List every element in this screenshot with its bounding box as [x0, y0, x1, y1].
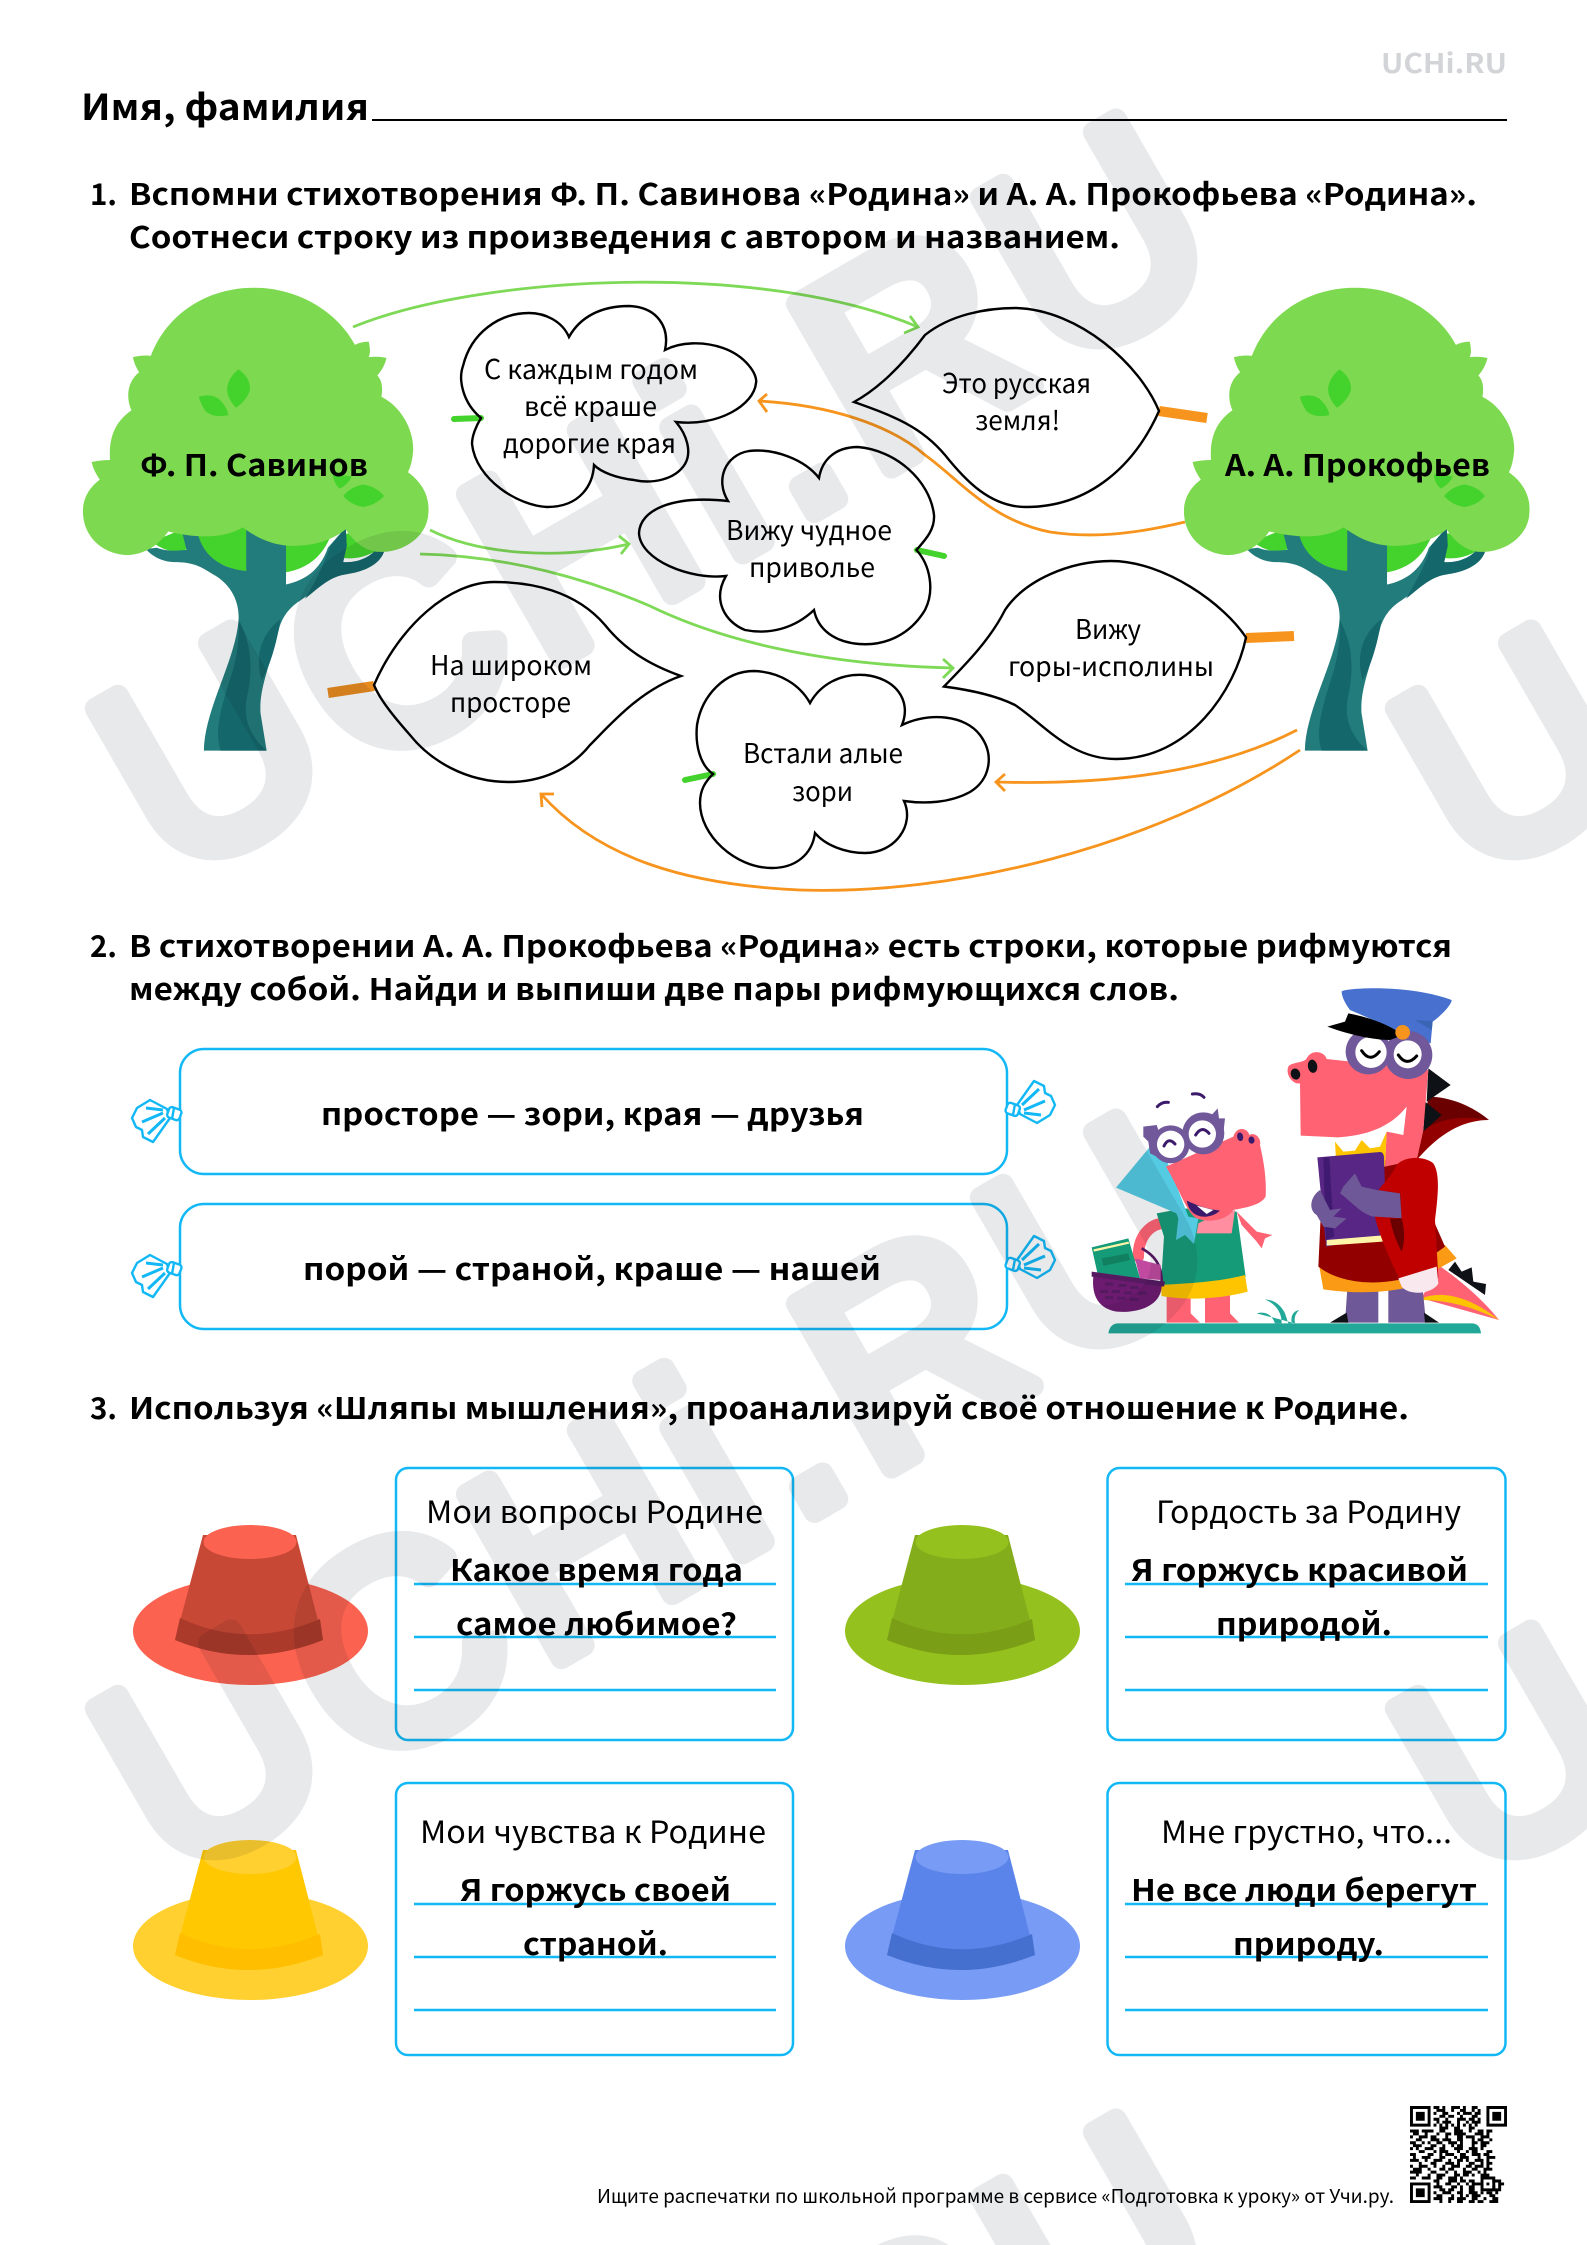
panel: sad: Не все люди берегут — [1131, 1866, 1477, 1910]
cloud: с каждым годом: всё краше — [524, 385, 657, 424]
name field: Имя, фамилия — [81, 79, 369, 131]
panel: pride: Я горжусь красивой — [1131, 1546, 1468, 1590]
question 1 heading — [90, 170, 1477, 257]
question 2 heading: между собой. Найди и выпиши две пары рифмующихся слов. — [129, 965, 1179, 1009]
tree: Prokofiev — [1184, 288, 1530, 751]
question 3 heading: Используя «Шляпы мышления», проанализируй своё отношение к Родине. — [129, 1384, 1409, 1428]
watermark: UCHi.RU — [48, 50, 1271, 934]
arrows orange — [541, 394, 1300, 890]
hat: green — [845, 1525, 1080, 1685]
cloud: с каждым годом: С каждым годом — [484, 348, 698, 387]
cloud: вижу чудное: приволье — [749, 546, 875, 585]
cloud: с каждым годом: дорогие края — [503, 422, 676, 461]
answer box 1 — [132, 1049, 1055, 1174]
panel: pride: природой. — [1216, 1600, 1392, 1644]
leaf: вижу горы-исполины: Вижу — [1075, 608, 1141, 647]
panel: my questions — [396, 1468, 793, 1740]
cloud: вижу чудное — [639, 447, 944, 644]
panel: my feelings: Мои чувства к Родине — [420, 1807, 766, 1852]
panel: pride: Гордость за Родину — [1156, 1487, 1461, 1532]
logo: UCHi.RU — [1381, 42, 1507, 81]
question 1 heading: Вспомни стихотворения Ф. П. Савинова «Родина» и А. А. Прокофьева «Родина». — [129, 170, 1477, 214]
panel: my questions: Мои вопросы Родине — [426, 1487, 763, 1532]
answer box 2 — [132, 1204, 1055, 1329]
tall dino — [1288, 988, 1499, 1323]
cloud: вижу чудное: Вижу чудное — [726, 509, 892, 548]
hat: red — [133, 1525, 368, 1685]
watermark: UCHi.RU — [48, 1050, 1271, 1934]
question 2 heading: 2. — [90, 922, 117, 966]
panel: sad — [1108, 1783, 1506, 2055]
small dino — [1092, 1094, 1272, 1323]
leaf: это русская земля: земля! — [975, 399, 1060, 438]
footer text: Ищите распечатки по школьной программе в сервисе «Подготовка к уроку» от Учи.ру. — [597, 2182, 1394, 2209]
leaf: на широком просторе: просторе — [450, 681, 571, 720]
panel: pride — [1108, 1468, 1506, 1740]
panel: my questions: Какое время года — [450, 1546, 743, 1590]
hat: blue — [845, 1840, 1080, 2000]
question 2 heading: В стихотворении А. А. Прокофьева «Родина» есть строки, которые рифмуются — [129, 922, 1452, 966]
answer box 2: порой — страной, краше — нашей — [303, 1245, 881, 1289]
question 3 heading: 3. — [90, 1384, 117, 1428]
leaf: вижу горы-исполины: горы-исполины — [1008, 645, 1214, 684]
leaf: это русская земля — [854, 308, 1207, 507]
ground and grass — [1108, 1299, 1481, 1333]
arrows green — [353, 282, 953, 678]
illustration: two dinosaurs — [1092, 988, 1499, 1333]
panel: my feelings: Я горжусь своей — [460, 1866, 731, 1910]
leaf: вижу горы-исполины — [944, 561, 1294, 759]
hat: yellow — [133, 1840, 368, 2000]
leaf: на широком просторе — [328, 582, 681, 782]
tree label: Prokofiev: А. А. Прокофьев — [1224, 441, 1490, 485]
panel: my questions: самое любимое? — [456, 1600, 737, 1644]
question 1 heading: 1. — [90, 170, 117, 214]
cloud: с каждым годом — [454, 306, 756, 507]
tree label: Savinov: Ф. П. Савинов — [140, 441, 368, 485]
cloud: встали алые зори — [685, 671, 989, 868]
panel: sad: природу. — [1233, 1920, 1384, 1964]
answer box 1: просторе — зори, края — друзья — [321, 1090, 864, 1134]
question 2 heading — [90, 922, 1452, 1009]
cloud: встали алые зори: зори — [792, 770, 853, 809]
tree: Savinov — [83, 288, 429, 751]
leaf: на широком просторе: На широком — [430, 644, 592, 683]
QR code — [1410, 2106, 1507, 2203]
panel: my feelings: страной. — [523, 1920, 668, 1964]
panel: sad: Мне грустно, что... — [1161, 1807, 1452, 1852]
question 1 heading: Соотнеси строку из произведения с автором и названием. — [129, 213, 1120, 257]
cloud: встали алые зори: Встали алые — [743, 732, 903, 771]
panel: my feelings — [396, 1783, 793, 2055]
leaf: это русская земля: Это русская — [942, 362, 1091, 401]
